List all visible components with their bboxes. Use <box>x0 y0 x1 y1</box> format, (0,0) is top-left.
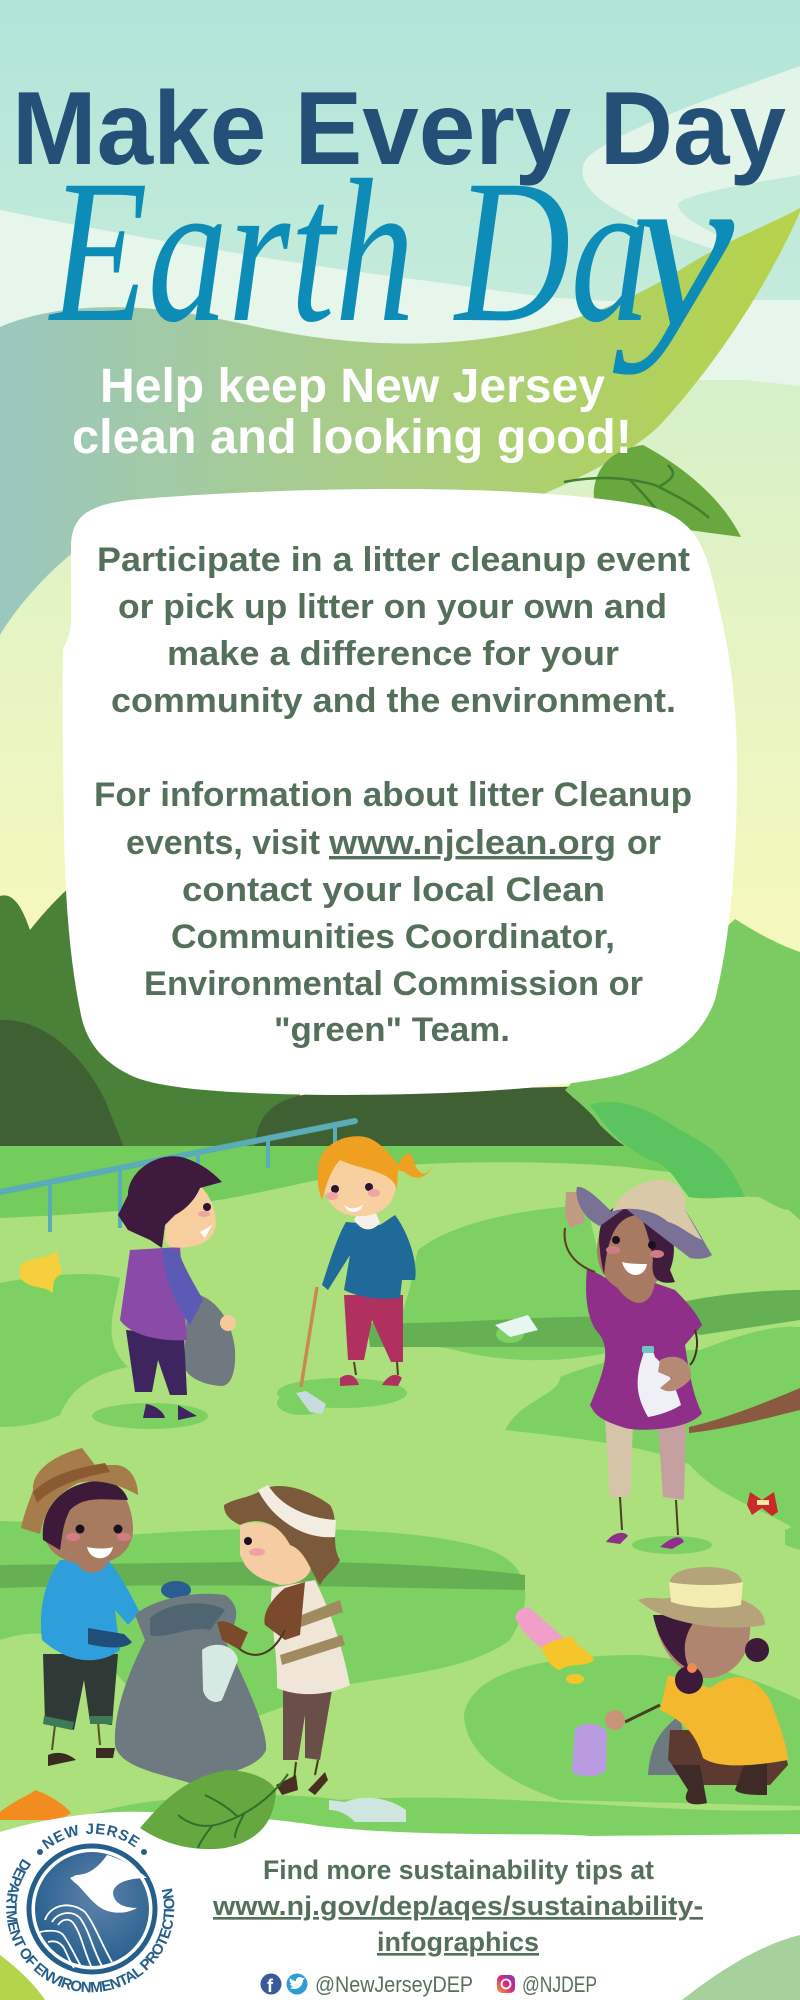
grass field <box>0 1146 800 1846</box>
paragraph 2 <box>94 776 692 1049</box>
icon: instagram <box>497 1975 515 1993</box>
paragraph 1: or pick up litter on your own and <box>118 588 667 626</box>
instagram handle: @NJDEP <box>522 1972 597 1997</box>
left fence <box>0 1121 355 1232</box>
background: sky and hills <box>0 0 800 1160</box>
footer text: Find more sustainability tips at <box>263 1855 654 1885</box>
subtitle: clean and looking good! <box>72 411 632 464</box>
paragraph 2: contact your local Clean <box>182 871 605 909</box>
icon: facebook: f <box>267 1976 274 1996</box>
title: Earth Day script: Earth Da <box>47 137 651 365</box>
logo: NJ Department of Environmental Protection seal: DEPARTMENT OF ENVIRONMENTAL PROTECTION <box>6 1858 174 1992</box>
top leaf <box>564 445 741 537</box>
figure: kid with headband <box>217 1485 350 1795</box>
paragraph 1 <box>97 541 690 720</box>
footer leaf <box>140 1770 288 1849</box>
paragraph 2: or <box>627 824 661 862</box>
litter: cups, spill, wrapper, bottle <box>0 1608 607 1822</box>
white message panel <box>63 489 737 1095</box>
litter: paper, banana, apple core <box>20 1250 778 1516</box>
paragraph 2: Environmental Commission or <box>144 965 643 1003</box>
footer text: infographics <box>377 1927 539 1957</box>
paragraph 1: make a difference for your <box>167 635 619 673</box>
figure: dark haired kid with purple shirt <box>92 1156 236 1429</box>
figure: boy in brown hat <box>21 1448 191 1766</box>
subtitle: Help keep New Jersey <box>100 360 605 413</box>
paragraph 2: "green" Team. <box>274 1011 510 1049</box>
figure: crouching child in yellow shirt <box>605 1567 788 1804</box>
figure: garbage bag <box>115 1594 266 1785</box>
white footer panel <box>0 1812 800 2000</box>
icon: twitter <box>286 1974 308 1994</box>
paragraph 2: www.njclean.org <box>328 824 616 862</box>
footer text: www.nj.gov/dep/aqes/sustainability- <box>212 1891 703 1921</box>
subtitle <box>72 360 632 464</box>
title: Earth Day script: y <box>612 120 735 375</box>
icon: facebook <box>260 1974 282 1996</box>
paragraph 2: events, visit <box>126 824 320 862</box>
figure: woman in hat holding bottle <box>565 1180 712 1554</box>
figure: orange haired girl with litter picker <box>277 1136 433 1415</box>
social handles <box>260 1972 597 1997</box>
paragraph 1: Participate in a litter cleanup event <box>97 541 690 579</box>
paragraph 2: For information about litter Cleanup <box>94 776 692 814</box>
title: Make Every Day: Make Every Day <box>12 71 786 187</box>
paragraph 1: community and the environment. <box>111 682 676 720</box>
right tree <box>565 919 800 1210</box>
paragraph 2: Communities Coordinator, <box>171 918 615 956</box>
footer text <box>212 1855 703 1957</box>
twitter and facebook handle: @NewJerseyDEP <box>315 1972 473 1997</box>
